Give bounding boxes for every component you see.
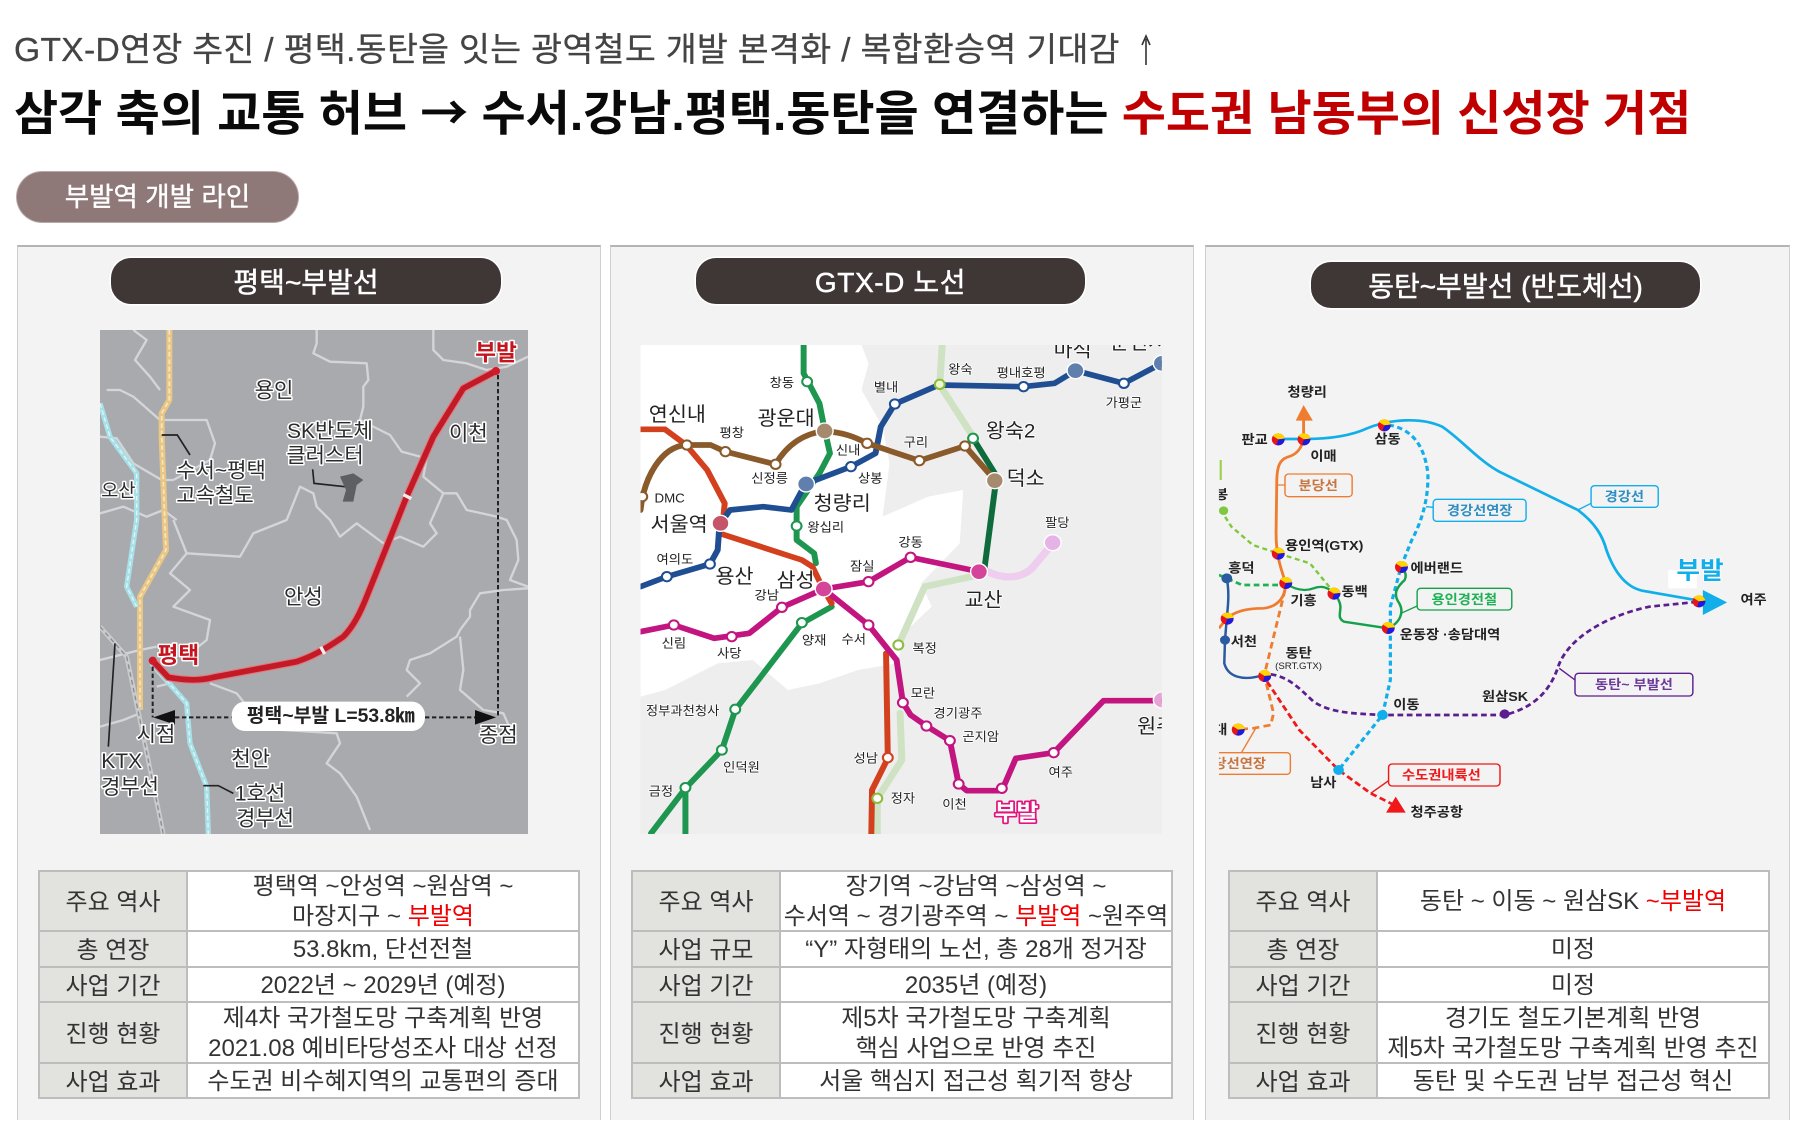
map: 동탄~부발선 network: 이동 <box>1393 697 1420 712</box>
map: GTX-D network: 연신내 <box>649 403 706 426</box>
row: 진행 현황 <box>40 1003 578 1062</box>
row: 사업 규모: 사업 규모 <box>658 937 754 964</box>
row: 사업 효과: 서울 핵심지 접근성 획기적 향상 <box>819 1068 1133 1094</box>
용인경전철 <box>1285 567 1406 628</box>
row: 사업 기간: 사업 기간 <box>66 972 160 1000</box>
row: 총 연장 <box>1230 932 1768 966</box>
station labels: 창동 <box>770 375 794 390</box>
row: 사업 효과 <box>633 1064 1171 1097</box>
map: GTX-D network: 신림 <box>662 636 686 651</box>
map: GTX-D network: 신정릉 <box>751 471 788 486</box>
map: 동탄~부발선 network: 용인역(GTX) <box>1285 537 1363 553</box>
line tags <box>1203 474 1693 793</box>
map: GTX-D network: 모란 <box>911 686 935 701</box>
map: GTX-D network: 구리 <box>904 435 928 450</box>
map: 동탄~부발선 network: 삼동 <box>1374 431 1401 446</box>
부발 label <box>1668 570 1697 588</box>
stations <box>637 377 1129 803</box>
map: 동탄~부발선 network: (SRT.GTX) <box>1275 661 1322 671</box>
map: 동탄~부발선 network: 용인경전철 <box>1431 591 1497 607</box>
map: 동탄~부발선 network: 기흥 <box>1290 592 1317 608</box>
map: GTX-D network: 여주 <box>1048 765 1073 780</box>
map: GTX-D network: 용산 <box>715 566 754 588</box>
row: 주요 역사: 평택역 ~안성역 ~원삼역 ~ <box>253 873 513 900</box>
map: GTX-D network: 부발 <box>995 800 1038 825</box>
row: 사업 기간: 사업 기간 <box>1256 972 1350 1000</box>
경강선연장 <box>1339 425 1428 770</box>
map: GTX-D network: 왕숙 <box>948 362 973 377</box>
map: 동탄~부발선 network: 수도권내륙선 <box>1402 767 1481 782</box>
map: 평택~부발선 route: 오산 <box>101 480 135 501</box>
map: 평택~부발선 route: 평택 <box>157 642 199 668</box>
map: 평택~부발선 route: 이천 <box>449 422 488 446</box>
subtitle: GTX-D연장 추진 / 평택.동탄을 잇는 광역철도 개발 본격화 / 복합환승역 기대감 <box>14 32 1120 69</box>
map: 동탄~부발선 network: 남사 <box>1310 775 1337 790</box>
row: 사업 효과: 사업 효과 <box>66 1068 160 1096</box>
map: 평택~부발선 route: 안성 <box>284 586 323 609</box>
navy <box>1223 583 1258 680</box>
section pill <box>17 172 298 222</box>
map: GTX-D network: 덕소 <box>1007 467 1045 490</box>
map: 동탄~부발선 network: 동탄~ 부발선 <box>1595 677 1673 692</box>
row: 진행 현황: 핵심 사업으로 반영 추진 <box>856 1034 1096 1062</box>
map: GTX-D network: DMC <box>654 491 685 506</box>
row: 사업 기간: 2035년 (예정) <box>905 972 1047 998</box>
map: 동탄~부발선 network: 판교 <box>1242 431 1268 447</box>
row: 사업 효과: 수도권 비수혜지역의 교통편의 증대 <box>207 1068 559 1094</box>
동탄~부발선 <box>1271 602 1699 715</box>
row: 사업 규모: “Y” 자형태의 노선, 총 28개 정거장 <box>805 936 1147 963</box>
map: 동탄~부발선 network: 에버랜드 <box>1411 560 1463 575</box>
map: 동탄~부발선 network: 동탄 <box>1285 645 1312 660</box>
map: GTX-D network: 춘천시 <box>1110 332 1167 354</box>
map: GTX-D network: 성남 <box>853 751 878 766</box>
map: GTX-D network: 잠실 <box>850 559 874 573</box>
row: 사업 기간 <box>1230 968 1768 1001</box>
map: GTX-D network: 인덕원 <box>723 760 760 775</box>
row: 진행 현황: 제5차 국가철도망 구축계획 반영 추진 <box>1387 1034 1759 1062</box>
interchange stations <box>712 355 1170 708</box>
경강선 <box>1278 420 1699 601</box>
line tag text: 분당선 <box>1299 478 1338 493</box>
row: 사업 효과: 동탄 및 수도권 남부 접근성 혁신 <box>1413 1068 1733 1094</box>
row: 사업 효과: 사업 효과 <box>658 1068 754 1096</box>
map: GTX-D network: 왕숙2 <box>986 420 1035 442</box>
분당선연장 <box>1239 590 1285 729</box>
row: 총 연장: 총 연장 <box>77 937 149 964</box>
map: 평택~부발선 route: 경부선 <box>101 776 159 799</box>
row: 진행 현황: 제4차 국가철도망 구축계획 반영 <box>223 1004 543 1032</box>
map: 평택~부발선 route: 평택~부발 L=53.8㎞ <box>247 705 415 727</box>
map: GTX-D network: 평내호평 <box>997 365 1046 380</box>
row: 진행 현황: 2021.08 예비타당성조사 대상 선정 <box>208 1034 558 1062</box>
map: GTX-D network: 교산 <box>965 589 1003 611</box>
map: GTX-D network <box>640 345 1162 834</box>
map: GTX-D network: 마석 <box>1054 339 1092 361</box>
map: GTX-D network: 복정 <box>912 641 937 656</box>
map: GTX-D network: 광운대 <box>758 407 815 430</box>
stations <box>1272 433 1285 445</box>
row: 주요 역사: 동탄 ~ 이동 ~ 원삼SK <box>1420 888 1639 915</box>
route line <box>153 371 496 680</box>
arrowheads <box>1703 590 1727 615</box>
map: GTX-D network: 평창 <box>719 425 744 440</box>
panel heading: 동탄~부발선 (반도체선) <box>1368 271 1643 302</box>
green line <box>651 345 832 834</box>
map: GTX-D network: 별내 <box>874 380 898 395</box>
brown line <box>641 431 995 510</box>
row: 진행 현황: 진행 현황 <box>66 1020 160 1048</box>
map: 동탄~부발선 network: 동백 <box>1342 583 1368 599</box>
row: 진행 현황: 진행 현황 <box>1256 1020 1350 1048</box>
map: 동탄~부발선 network: 청주공항 <box>1411 804 1463 819</box>
row: 진행 현황 <box>633 1003 1171 1062</box>
row: 사업 기간: 사업 기간 <box>658 972 754 1000</box>
red line <box>641 429 832 603</box>
map: 평택~부발선 route: 종점 <box>479 724 518 747</box>
map: 동탄~부발선 network: 경강선연장 <box>1447 503 1513 518</box>
row: 주요 역사: 주요 역사 <box>1256 889 1350 916</box>
map: 평택~부발선 route <box>100 330 528 834</box>
row: 총 연장: 미정 <box>1551 936 1595 963</box>
map: GTX-D network: 정자 <box>891 791 915 806</box>
map: GTX-D network: 왕십리 <box>807 520 844 535</box>
section pill: 부발역 개발 라인 <box>65 182 250 212</box>
map: GTX-D network: 서울역 <box>651 513 708 536</box>
map: 동탄~부발선 network: 경강선 <box>1605 489 1644 504</box>
row: 총 연장: 총 연장 <box>1267 937 1339 964</box>
map: 평택~부발선 route: 1호선 <box>235 782 285 806</box>
row: 총 연장: 53.8km, 단선전철 <box>293 936 473 963</box>
row: 진행 현황 <box>1230 1003 1768 1062</box>
map: 평택~부발선 route: 경부선 <box>236 808 294 830</box>
map: 동탄~부발선 network: 이매 <box>1310 448 1337 463</box>
panel: 동탄~부발선 <box>1205 245 1790 1120</box>
row: 진행 현황: 경기도 철도기본계획 반영 <box>1445 1004 1701 1032</box>
map: 동탄~부발선 network: 부발 <box>1676 557 1724 584</box>
map: GTX-D network: 강동 <box>898 535 923 550</box>
map: GTX-D network: 수서 <box>842 632 866 647</box>
row: 사업 기간: 2022년 ~ 2029년 (예정) <box>260 972 506 998</box>
table: 평택~부발선 <box>38 870 580 1099</box>
panel: GTX-D 노선 <box>610 245 1194 1120</box>
dimension line <box>153 375 498 717</box>
map: 동탄~부발선 network: 서천 <box>1231 633 1257 649</box>
map: 동탄~부발선 network: 원삼SK <box>1482 688 1528 704</box>
row: 사업 규모 <box>633 932 1171 966</box>
map: 평택~부발선 route: 고속철도 <box>176 484 254 508</box>
row: 사업 효과 <box>1230 1064 1768 1097</box>
map: 평택~부발선 route: 부발 <box>475 340 517 366</box>
map: 평택~부발선 route: 시점 <box>137 724 175 746</box>
title: 삼각 축의 교통 허브 → 수서.강남.평택.동탄을 연결하는 수도권 남동부의 신성장 거점 <box>14 74 1691 144</box>
map: GTX-D network: 청량리 <box>814 492 871 515</box>
labels: 청량리 <box>1287 384 1327 399</box>
map: GTX-D network: 원주 <box>1137 716 1175 738</box>
map: GTX-D network: 정부과천청사 <box>646 703 719 718</box>
lime dashed <box>1224 516 1330 588</box>
panel heading <box>1311 262 1700 308</box>
map: 평택~부발선 route: 천안 <box>231 748 270 771</box>
map: GTX-D network: 팔당 <box>1045 515 1070 530</box>
map: GTX-D network: 사당 <box>717 646 742 661</box>
map: GTX-D network: 이천 <box>942 797 967 811</box>
map: GTX-D network: 양재 <box>802 633 826 647</box>
map: 평택~부발선 route: KTX <box>101 750 142 773</box>
map: GTX-D network: 경기광주 <box>933 706 983 721</box>
panel heading <box>111 258 501 304</box>
row: 주요 역사: 주요 역사 <box>66 889 160 916</box>
leader lines <box>108 435 345 793</box>
row: 주요 역사: 장기역 ~강남역 ~삼성역 ~ <box>846 873 1106 900</box>
map: 동탄~부발선 network: 여주 <box>1740 592 1767 607</box>
row: 주요 역사: 마장지구 ~ 부발역 <box>292 903 474 930</box>
row: 사업 효과: 사업 효과 <box>1256 1068 1350 1096</box>
row: 사업 효과 <box>40 1064 578 1097</box>
map: GTX-D network: 삼성 <box>777 570 815 592</box>
panel: 평택~부발선 <box>17 245 601 1120</box>
map: GTX-D network: 금정 <box>649 784 673 798</box>
map: GTX-D network: 곤지암 <box>962 729 999 744</box>
map: GTX-D network: 상봉 <box>858 471 883 486</box>
map: 평택~부발선 route: 수서~평택 <box>176 460 266 482</box>
row: 총 연장 <box>40 932 578 966</box>
map: 동탄~부발선 network <box>1218 385 1766 818</box>
row: 진행 현황: 제5차 국가철도망 구축계획 <box>841 1004 1111 1032</box>
row: 주요 역사 <box>1230 872 1768 930</box>
panel heading <box>696 258 1085 304</box>
row: 주요 역사: 수서역 ~ 경기광주역 ~ 부발역 ~원주역 <box>784 903 1168 930</box>
map: GTX-D network: 강남 <box>755 588 779 602</box>
icon: up arrow <box>1141 34 1151 65</box>
row: 사업 기간 <box>40 968 578 1001</box>
row: 주요 역사: 주요 역사 <box>658 889 754 916</box>
table: GTX-D 노선 <box>631 870 1173 1099</box>
map: 평택~부발선 route: SK반도체 <box>287 420 373 443</box>
분당선 <box>1219 420 1304 628</box>
map: 동탄~부발선 network: 운동장 ·송담대역 <box>1400 626 1500 642</box>
pale lines <box>877 345 979 834</box>
row: 사업 기간 <box>633 968 1171 1001</box>
수도권내륙선 <box>1267 682 1392 804</box>
panel heading: 평택~부발선 <box>233 267 379 298</box>
row: 사업 기간: 미정 <box>1551 972 1595 998</box>
map: 평택~부발선 route: 클러스터 <box>286 444 364 468</box>
table: 동탄~부발선 <box>1228 870 1770 1099</box>
magenta line <box>641 557 1162 791</box>
row: 주요 역사: ~부발역 <box>1646 888 1726 915</box>
dimension label <box>232 702 425 731</box>
map: 평택~부발선 route: 용인 <box>255 380 293 402</box>
map: GTX-D network: 가평군 <box>1105 395 1142 410</box>
map: GTX-D network: 여의도 <box>657 552 693 567</box>
map: 동탄~부발선 network: 흥덕 <box>1228 560 1255 575</box>
map: GTX-D network: 신내 <box>836 443 860 457</box>
navy line <box>641 363 1162 587</box>
row: 진행 현황: 진행 현황 <box>658 1020 754 1048</box>
panel heading: GTX-D 노선 <box>815 267 966 298</box>
row: 주요 역사 <box>40 872 578 930</box>
rail lines <box>100 330 208 834</box>
row: 주요 역사 <box>633 872 1171 930</box>
